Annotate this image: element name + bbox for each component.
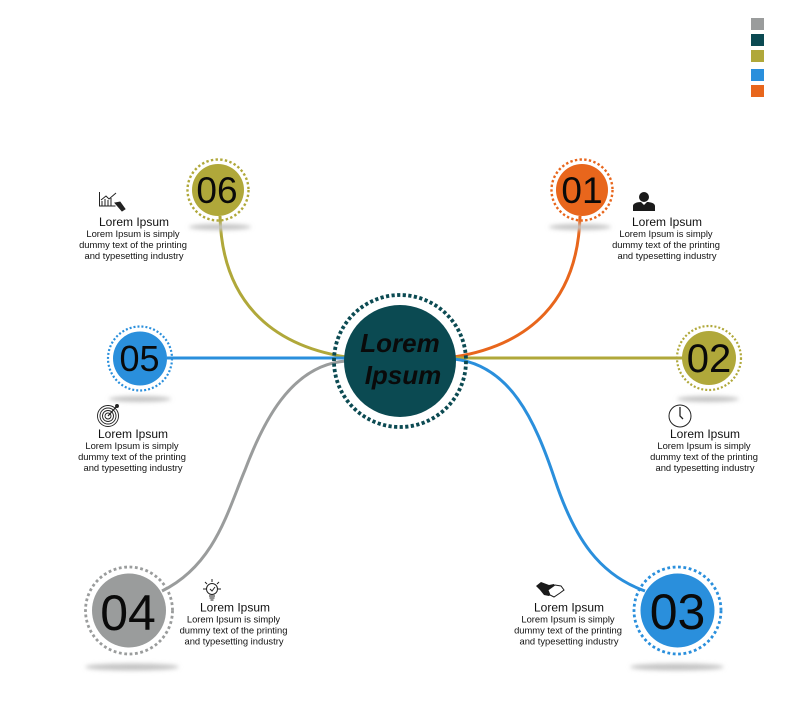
text block 05 with target icon: Lorem Ipsum is simply xyxy=(85,440,179,451)
node 04: 04 xyxy=(100,585,156,641)
text block 01 with person icon: dummy text of the printing xyxy=(612,239,720,250)
icon: clock xyxy=(669,405,691,427)
text block 04 with light bulb icon xyxy=(180,579,287,646)
text block 06 with chart icon: Lorem Ipsum xyxy=(99,215,169,229)
icon: businessman xyxy=(633,192,655,211)
node 04 xyxy=(85,567,179,670)
connector lines xyxy=(162,216,683,591)
central hub: Lorem xyxy=(360,328,440,358)
node 02: 02 xyxy=(687,337,731,381)
text block 05 with target icon: dummy text of the printing xyxy=(78,451,186,462)
text block 04 with light bulb icon: Lorem Ipsum xyxy=(200,600,270,614)
text block 02 with clock icon: Lorem Ipsum xyxy=(670,427,740,441)
text block 04 with light bulb icon: dummy text of the printing xyxy=(180,624,287,636)
text block 01 with person icon: Lorem Ipsum xyxy=(632,215,702,229)
text block 03 with handshake icon: and typesetting industry xyxy=(519,636,619,646)
node 06: 06 xyxy=(196,170,238,211)
text block 02 with clock icon: Lorem Ipsum is simply xyxy=(657,440,751,451)
text block 03 with handshake icon: Lorem Ipsum is simply xyxy=(521,614,615,624)
text block 06 with chart icon: Lorem Ipsum is simply xyxy=(86,228,180,239)
node 03: 03 xyxy=(650,584,705,640)
text block 04 with light bulb icon: Lorem Ipsum is simply xyxy=(187,614,280,624)
text block 02 with clock icon: and typesetting industry xyxy=(655,462,755,473)
text block 03 with handshake icon xyxy=(514,582,622,646)
node 05 xyxy=(108,326,172,402)
node 05: 05 xyxy=(119,338,160,379)
central hub xyxy=(334,295,466,427)
node 01: 01 xyxy=(561,170,603,211)
icon: handshake xyxy=(536,582,564,597)
text block 03 with handshake icon: Lorem Ipsum xyxy=(534,600,604,614)
text block 01 with person icon xyxy=(612,192,720,261)
text block 05 with target icon xyxy=(78,404,186,473)
icon: target xyxy=(98,404,118,426)
text block 04 with light bulb icon: and typesetting industry xyxy=(184,636,284,646)
legend: colour swatches xyxy=(751,18,764,97)
text block 06 with chart icon: and typesetting industry xyxy=(84,250,184,261)
text block 06 with chart icon xyxy=(79,192,187,261)
node 01 xyxy=(549,160,612,230)
icon: light bulb xyxy=(203,579,221,600)
text block 01 with person icon: Lorem Ipsum is simply xyxy=(619,228,713,239)
text block 05 with target icon: and typesetting industry xyxy=(83,462,183,473)
node 06 xyxy=(188,160,251,230)
text block 02 with clock icon: dummy text of the printing xyxy=(650,451,758,462)
text block 01 with person icon: and typesetting industry xyxy=(617,250,717,261)
node 02 xyxy=(677,326,741,402)
text block 06 with chart icon: dummy text of the printing xyxy=(79,239,187,250)
text block 05 with target icon: Lorem Ipsum xyxy=(98,427,168,441)
icon: growth chart with hand xyxy=(100,192,125,211)
node 03 xyxy=(630,567,724,670)
text block 03 with handshake icon: dummy text of the printing xyxy=(514,624,622,636)
central hub: Ipsum xyxy=(365,360,441,390)
text block 02 with clock icon xyxy=(650,405,758,473)
